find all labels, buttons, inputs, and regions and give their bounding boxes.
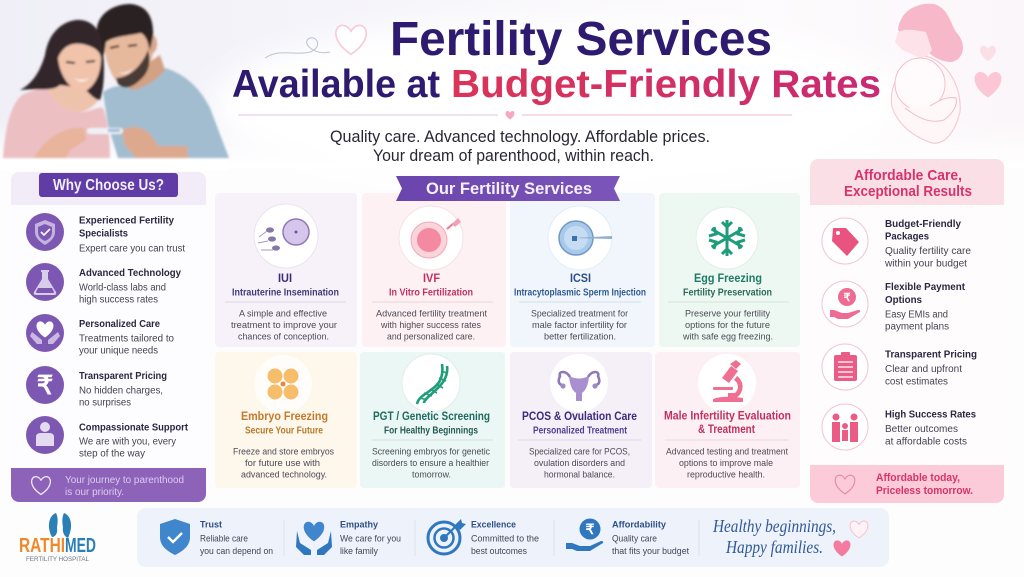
value: affordability: that fits your budget	[612, 545, 689, 556]
panel: why choose us	[11, 172, 206, 502]
decoration: looping thread and outline heart	[265, 25, 366, 58]
item: compassionate support: step of the way	[79, 448, 145, 460]
card: ICSI: ICSI	[570, 271, 591, 285]
logo: Rathimed Fertility Hospital: RATHI	[19, 535, 65, 557]
item: flexible payment options	[822, 281, 965, 332]
item: budget-friendly packages: Packages	[885, 232, 929, 242]
item: advanced technology: Advanced Technology	[79, 268, 181, 279]
title: Fertility Services	[390, 13, 772, 66]
heading: affordable care	[844, 167, 972, 200]
card: ICSI: better fertilization.	[544, 332, 616, 342]
card: embryo freezing	[215, 352, 357, 488]
item: compassionate support	[26, 416, 188, 460]
callout: affordable today: Affordable today,	[876, 472, 960, 484]
tagline: healthy beginnings: Happy families.	[725, 537, 823, 557]
item: transparent pricing: ₹	[37, 370, 53, 400]
card: PCOS and ovulation care: ovulation disorders and	[534, 458, 625, 469]
logo: Rathimed Fertility Hospital	[19, 513, 96, 563]
logo: Rathimed Fertility Hospital: MED	[65, 535, 96, 557]
card: PCOS and ovulation care	[510, 352, 652, 488]
callout: affordable today	[810, 465, 1004, 503]
value: empathy	[296, 520, 401, 556]
value: affordability: Affordability	[612, 520, 667, 530]
icon: uterus	[550, 354, 608, 412]
item: experienced specialists: Specialists	[79, 228, 128, 240]
card: PCOS and ovulation care: Personalized Treatment	[533, 426, 628, 436]
item: transparent pricing: no surprises	[79, 398, 131, 408]
card: male infertility evaluation: Male Infertility Evaluation	[664, 408, 791, 422]
item: high success rates: at affordable costs	[885, 436, 967, 448]
item: advanced technology: World-class labs and	[79, 282, 166, 294]
photo: smiling couple holding a pregnancy test	[3, 4, 229, 158]
card: male infertility evaluation: Advanced testing and treatment	[666, 446, 788, 458]
icon: ICSI injection	[548, 206, 612, 270]
card: embryo freezing: Freeze and store embryos	[233, 446, 334, 458]
item: budget-friendly packages: Quality fertility care	[885, 246, 971, 257]
value: excellence: best outcomes	[471, 545, 527, 556]
value: trust: Reliable care	[200, 532, 248, 544]
item: transparent pricing	[26, 366, 167, 408]
card: egg freezing	[659, 193, 800, 347]
item: transparent pricing: cost estimates	[885, 376, 948, 388]
heading: why choose us	[39, 173, 178, 197]
value: affordability: ₹	[586, 521, 595, 537]
card: male infertility evaluation: & Treatment	[698, 422, 755, 436]
item: high success rates	[822, 404, 976, 450]
icon: DNA helix	[402, 354, 460, 412]
illustration: mother and baby	[891, 4, 1001, 143]
item: compassionate support: We are with you, every	[79, 436, 176, 448]
subtitle: Your dream of parenthood, within reach.	[373, 147, 654, 165]
value: trust	[160, 519, 273, 556]
panel: values strip	[137, 508, 889, 567]
callout: affordable today: Priceless tomorrow.	[876, 485, 973, 497]
card: IUI: Intrauterine Insemination	[232, 288, 339, 298]
card: PGT genetic screening: disorders to ensure a healthier	[372, 458, 490, 469]
card: embryo freezing: Secure Your Future	[245, 426, 323, 436]
icon: microscope	[698, 354, 756, 412]
item: budget-friendly packages	[822, 218, 971, 270]
item: advanced technology: high success rates	[79, 294, 158, 306]
callout: journey to parenthood: is our priority.	[65, 487, 124, 498]
value: excellence	[428, 519, 539, 556]
card: egg freezing: Egg Freezing	[694, 271, 762, 285]
card: egg freezing: options for the future	[685, 320, 770, 331]
card: ICSI: Specialized treatment for	[531, 308, 629, 320]
subtitle: Quality care. Advanced technology. Affordable prices.	[330, 128, 710, 146]
banner: our fertility services	[396, 176, 620, 201]
heading: affordable care: Exceptional Results	[844, 183, 972, 200]
value: trust: you can depend on	[200, 545, 273, 556]
value: excellence: Excellence	[471, 520, 516, 530]
value: empathy: Empathy	[340, 520, 379, 530]
panel: affordable care	[810, 159, 1004, 503]
card: IUI: A simple and effective	[239, 308, 327, 320]
card: embryo freezing: Embryo Freezing	[241, 409, 328, 423]
subtitle	[330, 128, 710, 165]
tagline: healthy beginnings: Healthy beginnings,	[712, 516, 836, 536]
card: PGT genetic screening	[360, 352, 505, 488]
heading: affordable care: Affordable Care,	[854, 167, 962, 184]
item: compassionate support: Compassionate Support	[79, 422, 188, 434]
card: IVF: In Vitro Fertilization	[389, 288, 473, 298]
card: ICSI	[510, 193, 655, 347]
item: transparent pricing: Clear and upfront	[885, 364, 962, 375]
card: IUI	[215, 193, 357, 347]
title: Budget-Friendly Rates	[451, 63, 881, 106]
card: ICSI: male factor infertility for	[532, 320, 628, 331]
item: budget-friendly packages: within your budget	[884, 258, 967, 270]
banner: our fertility services: Our Fertility Services	[426, 180, 592, 198]
tagline: healthy beginnings	[712, 516, 836, 557]
value: trust: Trust	[200, 520, 223, 530]
card: IUI: chances of conception.	[238, 332, 329, 342]
item: personalized care	[26, 314, 174, 356]
card: PGT genetic screening: PGT / Genetic Screening	[373, 409, 490, 423]
card: male infertility evaluation: reproductive health.	[687, 470, 765, 480]
card: IVF: Advanced fertility treatment	[376, 308, 487, 320]
logo: Rathimed Fertility Hospital: FERTILITY HOSPITAL	[26, 556, 89, 563]
callout: journey to parenthood: Your journey to parenthood	[65, 475, 184, 486]
item: flexible payment options: Options	[885, 295, 922, 306]
icon: four-cell embryo	[254, 355, 312, 413]
item: transparent pricing: Transparent Pricing	[79, 371, 167, 382]
item: personalized care: Treatments tailored to	[79, 334, 174, 344]
value: excellence: Committed to the	[471, 532, 539, 544]
card: IUI: treatment to improve your	[231, 320, 338, 331]
card: PCOS and ovulation care: PCOS & Ovulation Care	[522, 409, 637, 423]
card: egg freezing: with safe egg freezing.	[682, 332, 773, 342]
heading: why choose us: Why Choose Us?	[53, 177, 164, 194]
icon: hearts	[834, 521, 868, 557]
item: flexible payment options: Flexible Payment	[885, 282, 965, 293]
card: male infertility evaluation: options to improve male	[679, 458, 773, 469]
item: high success rates: High Success Rates	[885, 410, 976, 420]
value: affordability	[566, 518, 689, 556]
item: personalized care: your unique needs	[79, 346, 158, 356]
card: IUI: IUI	[278, 271, 292, 285]
item: experienced specialists: Experienced Fertility	[79, 216, 174, 226]
value: empathy: We care for you	[340, 532, 401, 544]
item: budget-friendly packages: Budget-Friendly	[885, 219, 961, 230]
item: flexible payment options: payment plans	[885, 322, 949, 332]
icon: IVF egg and pipette	[399, 206, 463, 270]
item: transparent pricing	[822, 344, 977, 390]
card: ICSI: Intracytoplasmic Sperm Injection	[514, 288, 646, 298]
value: empathy: like family	[340, 545, 378, 556]
item: experienced specialists: Expert care you can trust	[79, 244, 185, 254]
item: advanced technology	[26, 263, 181, 306]
card: PCOS and ovulation care: Specialized care for PCOS,	[529, 446, 630, 458]
title divider with heart	[238, 111, 792, 120]
item: personalized care: Personalized Care	[79, 319, 160, 330]
card: male infertility evaluation	[655, 352, 800, 488]
card: egg freezing: Fertility Preservation	[683, 288, 772, 298]
card: IVF	[362, 193, 506, 347]
title: Available at	[232, 63, 440, 106]
callout: journey to parenthood	[11, 468, 206, 502]
item: transparent pricing: Transparent Pricing	[885, 350, 977, 360]
title	[232, 13, 881, 106]
card: PGT genetic screening: Screening embryos for genetic	[372, 446, 490, 458]
item: experienced specialists	[26, 213, 185, 254]
item: flexible payment options: Easy EMIs and	[885, 310, 948, 320]
item: flexible payment options: ₹	[844, 292, 850, 304]
value: affordability: Quality care	[612, 532, 657, 544]
card: egg freezing: Preserve your fertility	[685, 308, 770, 320]
card: PGT genetic screening: For Healthy Beginnings	[384, 426, 478, 436]
card: embryo freezing: advanced technology.	[241, 470, 327, 480]
card: embryo freezing: for future use with	[245, 458, 320, 469]
icon: sperm and egg	[254, 204, 318, 268]
item: transparent pricing: No hidden charges,	[79, 386, 163, 396]
card: IVF: with higher success rates	[380, 320, 481, 331]
icon: snowflake	[696, 207, 758, 269]
item: high success rates: Better outcomes	[885, 424, 958, 435]
card: PCOS and ovulation care: hormonal balance.	[544, 470, 615, 480]
card: IVF: IVF	[423, 271, 440, 285]
card: PGT genetic screening: tomorrow.	[412, 470, 451, 480]
card: IVF: and personalized care.	[387, 332, 475, 342]
